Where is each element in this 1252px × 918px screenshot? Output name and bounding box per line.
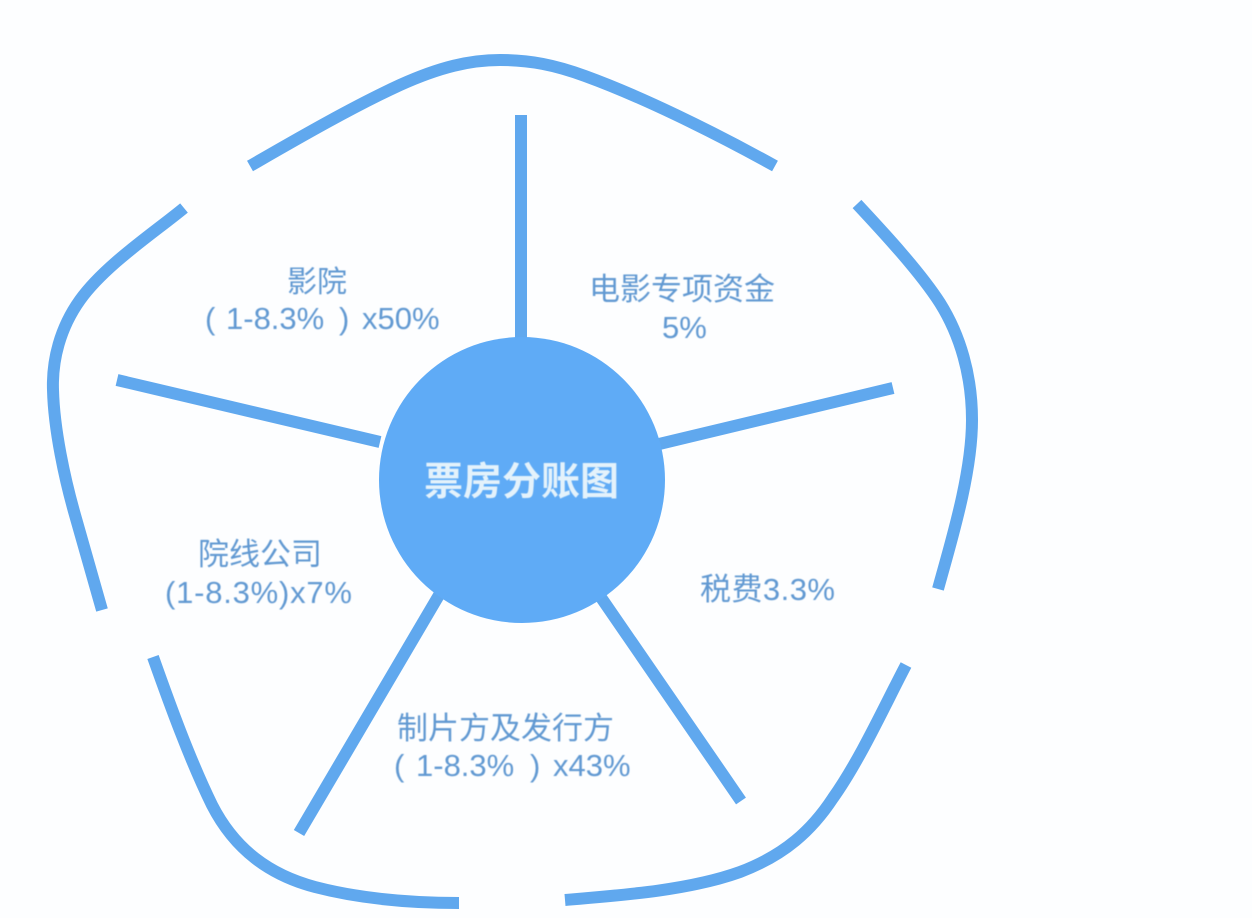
arc: bottom right	[565, 665, 906, 900]
spoke: right	[655, 388, 893, 445]
spokes	[117, 115, 893, 833]
label: producer and distributor: 制片方及发行方	[397, 711, 614, 746]
label: producer and distributor: x43%	[553, 748, 631, 783]
spoke: top	[515, 115, 527, 345]
arc: bottom left	[153, 657, 459, 903]
label: producer and distributor: )	[530, 748, 540, 783]
label: film special fund	[589, 272, 775, 345]
label: cinema	[205, 266, 440, 336]
label: cinema: )	[339, 301, 349, 336]
label: tax: 税费3.3%	[700, 572, 835, 607]
label: film special fund: 5%	[662, 310, 707, 345]
label: producer and distributor: 1-8.3%	[416, 748, 514, 783]
label: cinema: x50%	[362, 301, 440, 336]
label: cinema: 影院	[287, 266, 347, 299]
arc: right	[857, 204, 972, 589]
label: theater chain: (1-8.3%)x7%	[165, 575, 352, 610]
center circle	[379, 337, 665, 623]
label: theater chain: 院线公司	[198, 537, 322, 572]
label: film special fund: 电影专项资金	[589, 272, 775, 307]
center title: 票房分账图	[424, 461, 619, 504]
spoke: left	[117, 380, 380, 442]
arc: left	[53, 208, 184, 610]
spoke: lower right	[600, 596, 741, 801]
label: producer and distributor: (	[394, 748, 405, 783]
arc: top	[250, 60, 775, 166]
label: producer and distributor	[394, 711, 631, 783]
outer ring segments	[53, 60, 972, 903]
label: cinema: (	[205, 301, 216, 336]
spoke: lower left	[299, 590, 442, 833]
label: theater chain	[165, 537, 352, 610]
label: cinema: 1-8.3%	[226, 301, 324, 336]
